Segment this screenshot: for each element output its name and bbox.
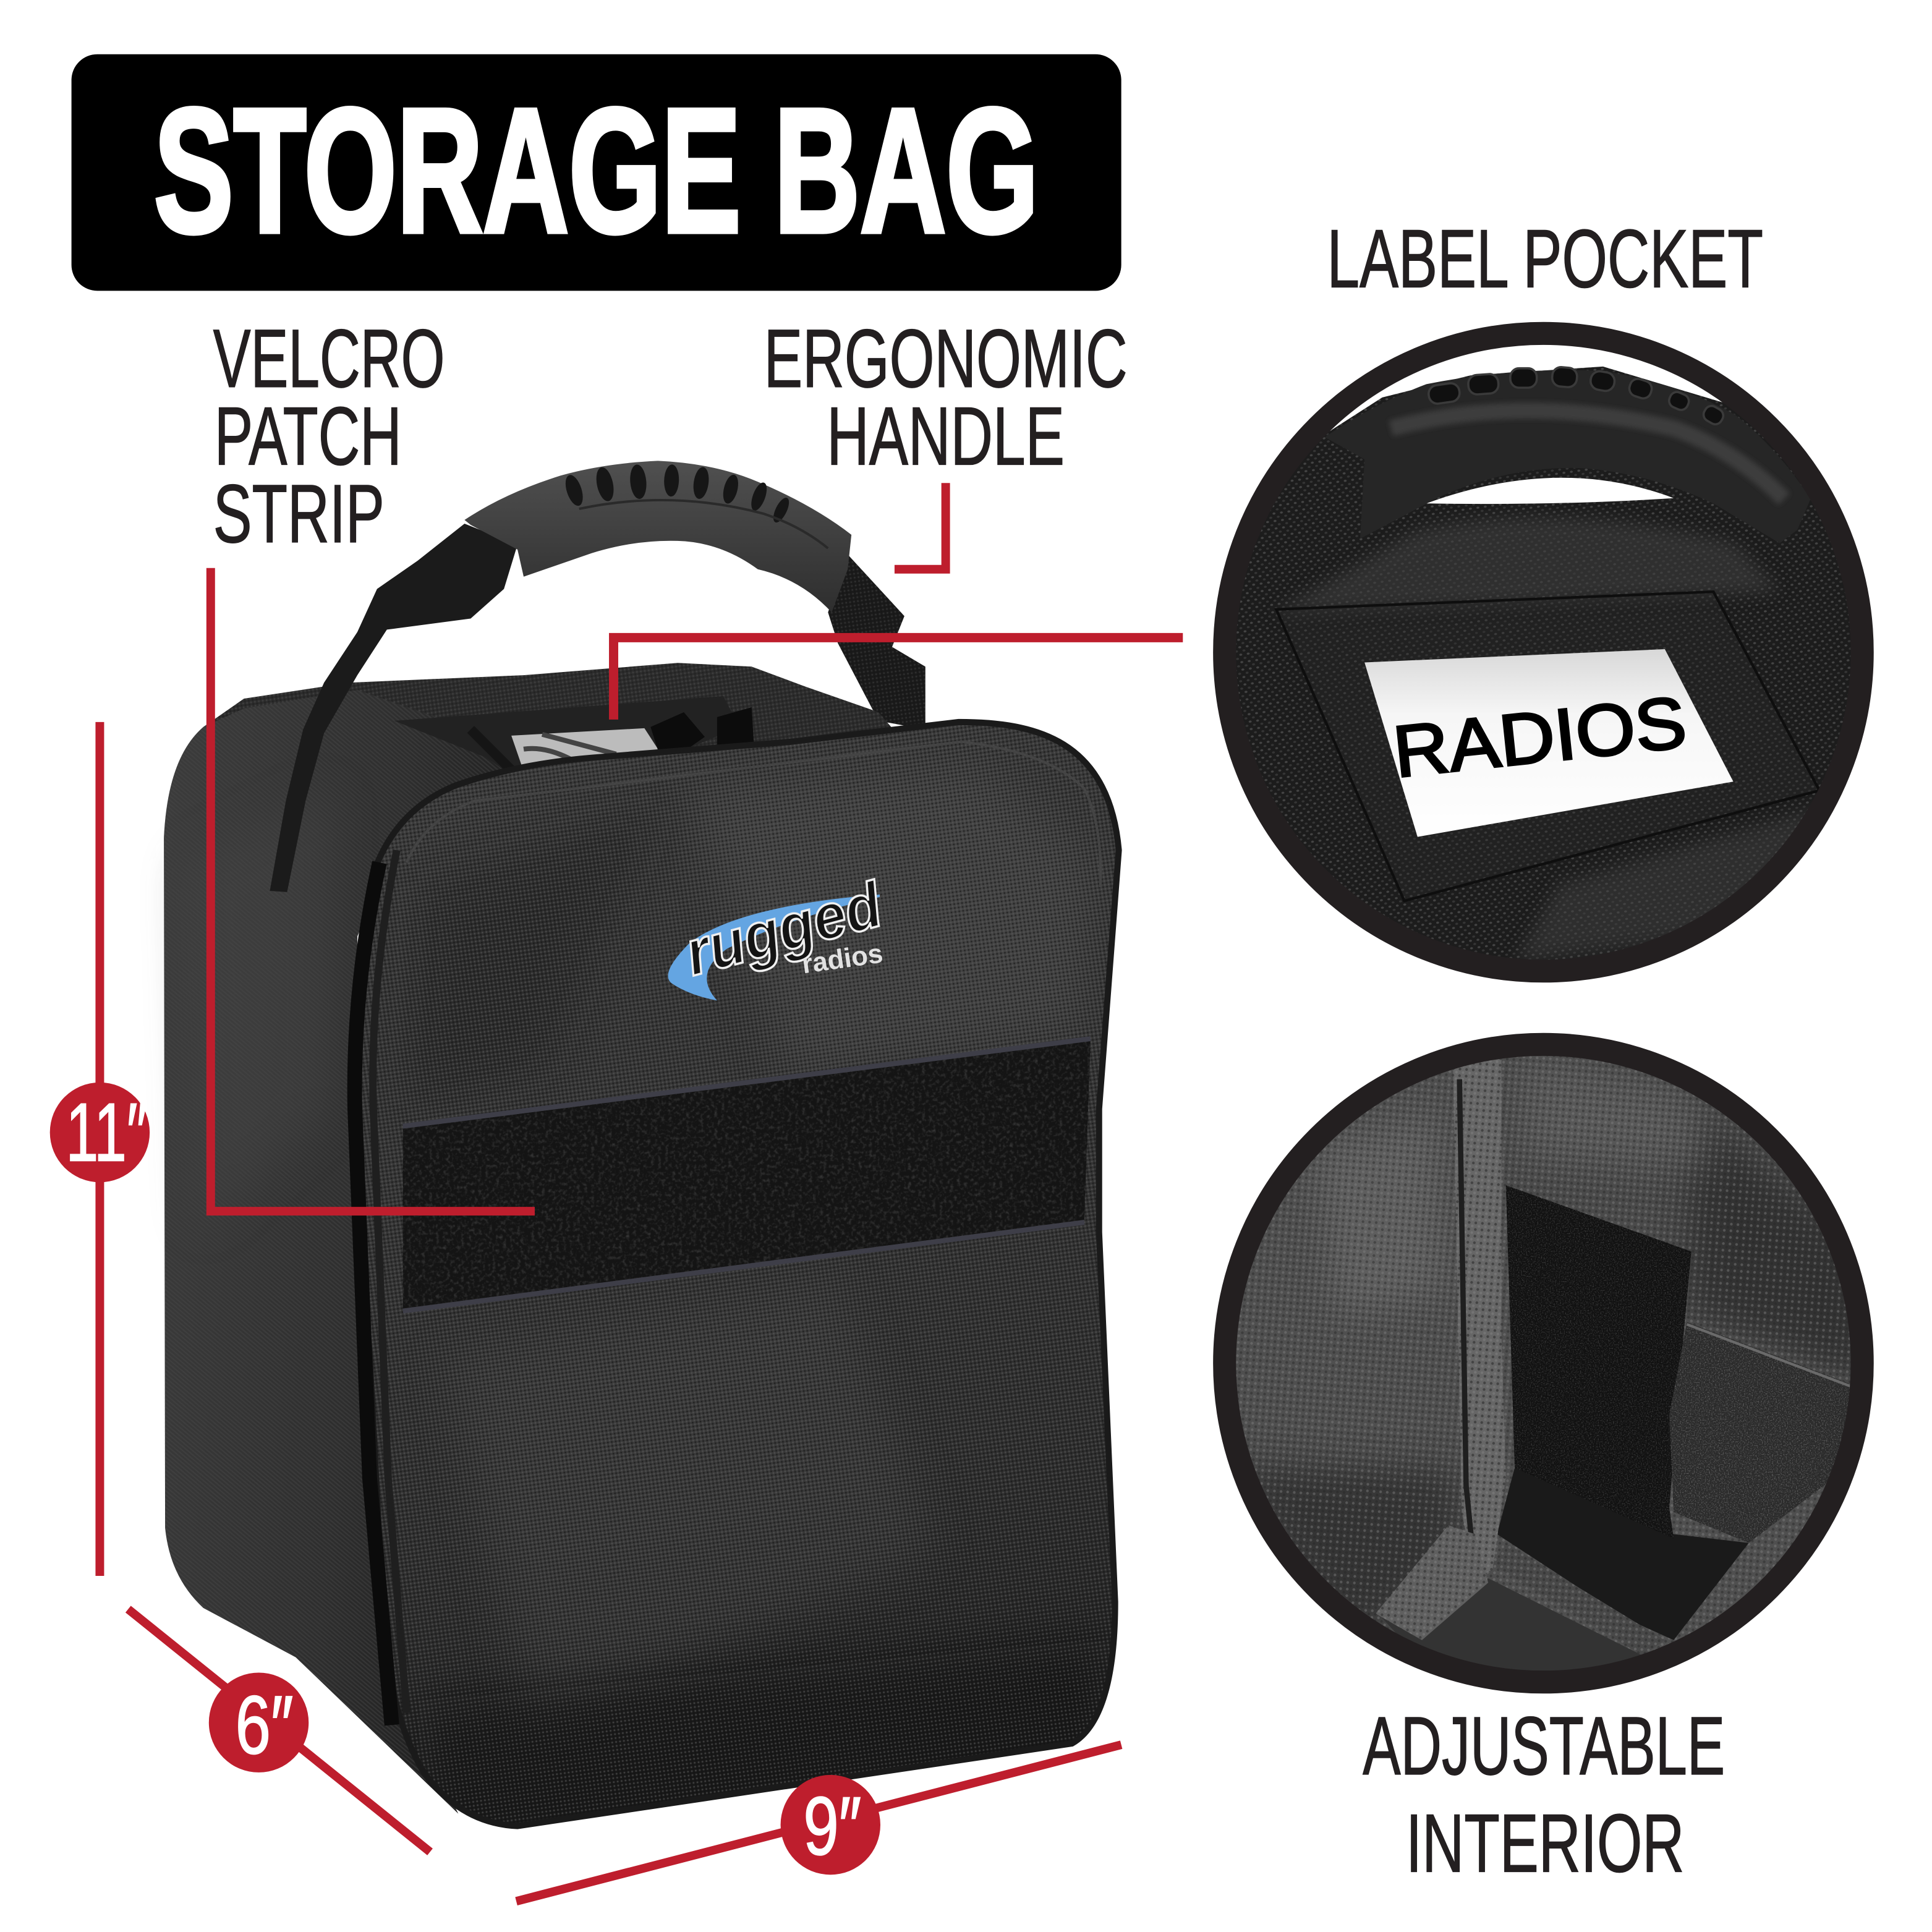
- handle slots: [1428, 367, 1726, 427]
- ring: [1225, 1044, 1862, 1682]
- pocket frame: [1276, 592, 1819, 901]
- callout line: label pocket: [614, 637, 1183, 720]
- floor seam: [1492, 1543, 1665, 1656]
- dimension: width 9 inches: 9″: [803, 1780, 861, 1872]
- velcro hook panel: [1506, 1185, 1692, 1539]
- dark recess: [1497, 1468, 1749, 1640]
- label: ergonomic handle: [764, 313, 1128, 482]
- callout line: velcro: [211, 568, 535, 1211]
- label: ergonomic handle: HANDLE: [827, 390, 1065, 482]
- side panel highlight: [185, 789, 333, 1232]
- weave: [1206, 1026, 1898, 1719]
- label: velcro patch strip: [213, 313, 445, 560]
- dimension: width 9 inches: [516, 1745, 1121, 1901]
- corner seam: [1376, 1525, 1488, 1640]
- title text: STORAGE BAG: [154, 72, 1039, 270]
- dimension: height 11 inches: [50, 722, 150, 1576]
- label: adjustable interior: INTERIOR: [1406, 1797, 1684, 1889]
- label: velcro patch strip: STRIP: [213, 468, 385, 560]
- fabric base: [1206, 309, 1898, 1002]
- callout line: handle: [895, 483, 946, 569]
- lower fabric highlight: [1515, 804, 1832, 963]
- detail circle: adjustable interior: [1206, 1026, 1898, 1719]
- bag top panel: [203, 663, 893, 887]
- left fabric shading: [1232, 1468, 1466, 1645]
- handwritten label: RADIOS: [1389, 681, 1690, 793]
- velcro loop band: [1669, 1322, 1850, 1543]
- title banner: [72, 54, 1121, 291]
- label: velcro patch strip: VELCRO: [213, 313, 445, 405]
- window: [1364, 649, 1734, 837]
- front panel piping and zipper: [351, 722, 1119, 1826]
- rubber handle grip: [464, 461, 851, 613]
- ring: [1225, 333, 1862, 971]
- velcro patch strip: [403, 1039, 1091, 1311]
- bag front panel: [351, 722, 1119, 1826]
- dimension: depth 6 inches: [128, 1609, 430, 1852]
- zipper pulls: [650, 707, 754, 754]
- upper right fabric: [1497, 1044, 1868, 1379]
- detail circle: label pocket: [1206, 309, 1898, 1002]
- white gap under handle: [1426, 478, 1674, 504]
- bag photo: [164, 461, 1134, 1848]
- label: adjustable interior: ADJUSTABLE: [1363, 1700, 1725, 1792]
- dimension: depth 6 inches: 6″: [236, 1679, 293, 1771]
- fabric shading: [1272, 517, 1780, 614]
- rugged radios logo: rugged: [678, 867, 890, 989]
- label: ergonomic handle: ERGONOMIC: [764, 313, 1128, 405]
- dimension: height 11 inches: 11″: [66, 1086, 147, 1178]
- white backdrop above handle: [1294, 322, 1802, 441]
- vertical seam: [1453, 1057, 1506, 1578]
- handle grip slots: [562, 464, 792, 525]
- bag handle strap: right: [828, 555, 926, 730]
- label: label pocket: LABEL POCKET: [1327, 213, 1763, 305]
- rugged radios logo: radios: [800, 938, 885, 979]
- label pocket on bag top: [394, 696, 739, 789]
- fabric shading: [690, 764, 1097, 1072]
- fabric base: [1206, 1026, 1898, 1719]
- handle grip: [1325, 370, 1811, 543]
- bag side panel: [164, 690, 542, 1814]
- bag handle strap: left: [270, 524, 517, 892]
- floor: [1382, 1578, 1647, 1688]
- label: velcro patch strip: PATCH: [215, 390, 402, 482]
- label: adjustable interior: [1363, 1700, 1725, 1889]
